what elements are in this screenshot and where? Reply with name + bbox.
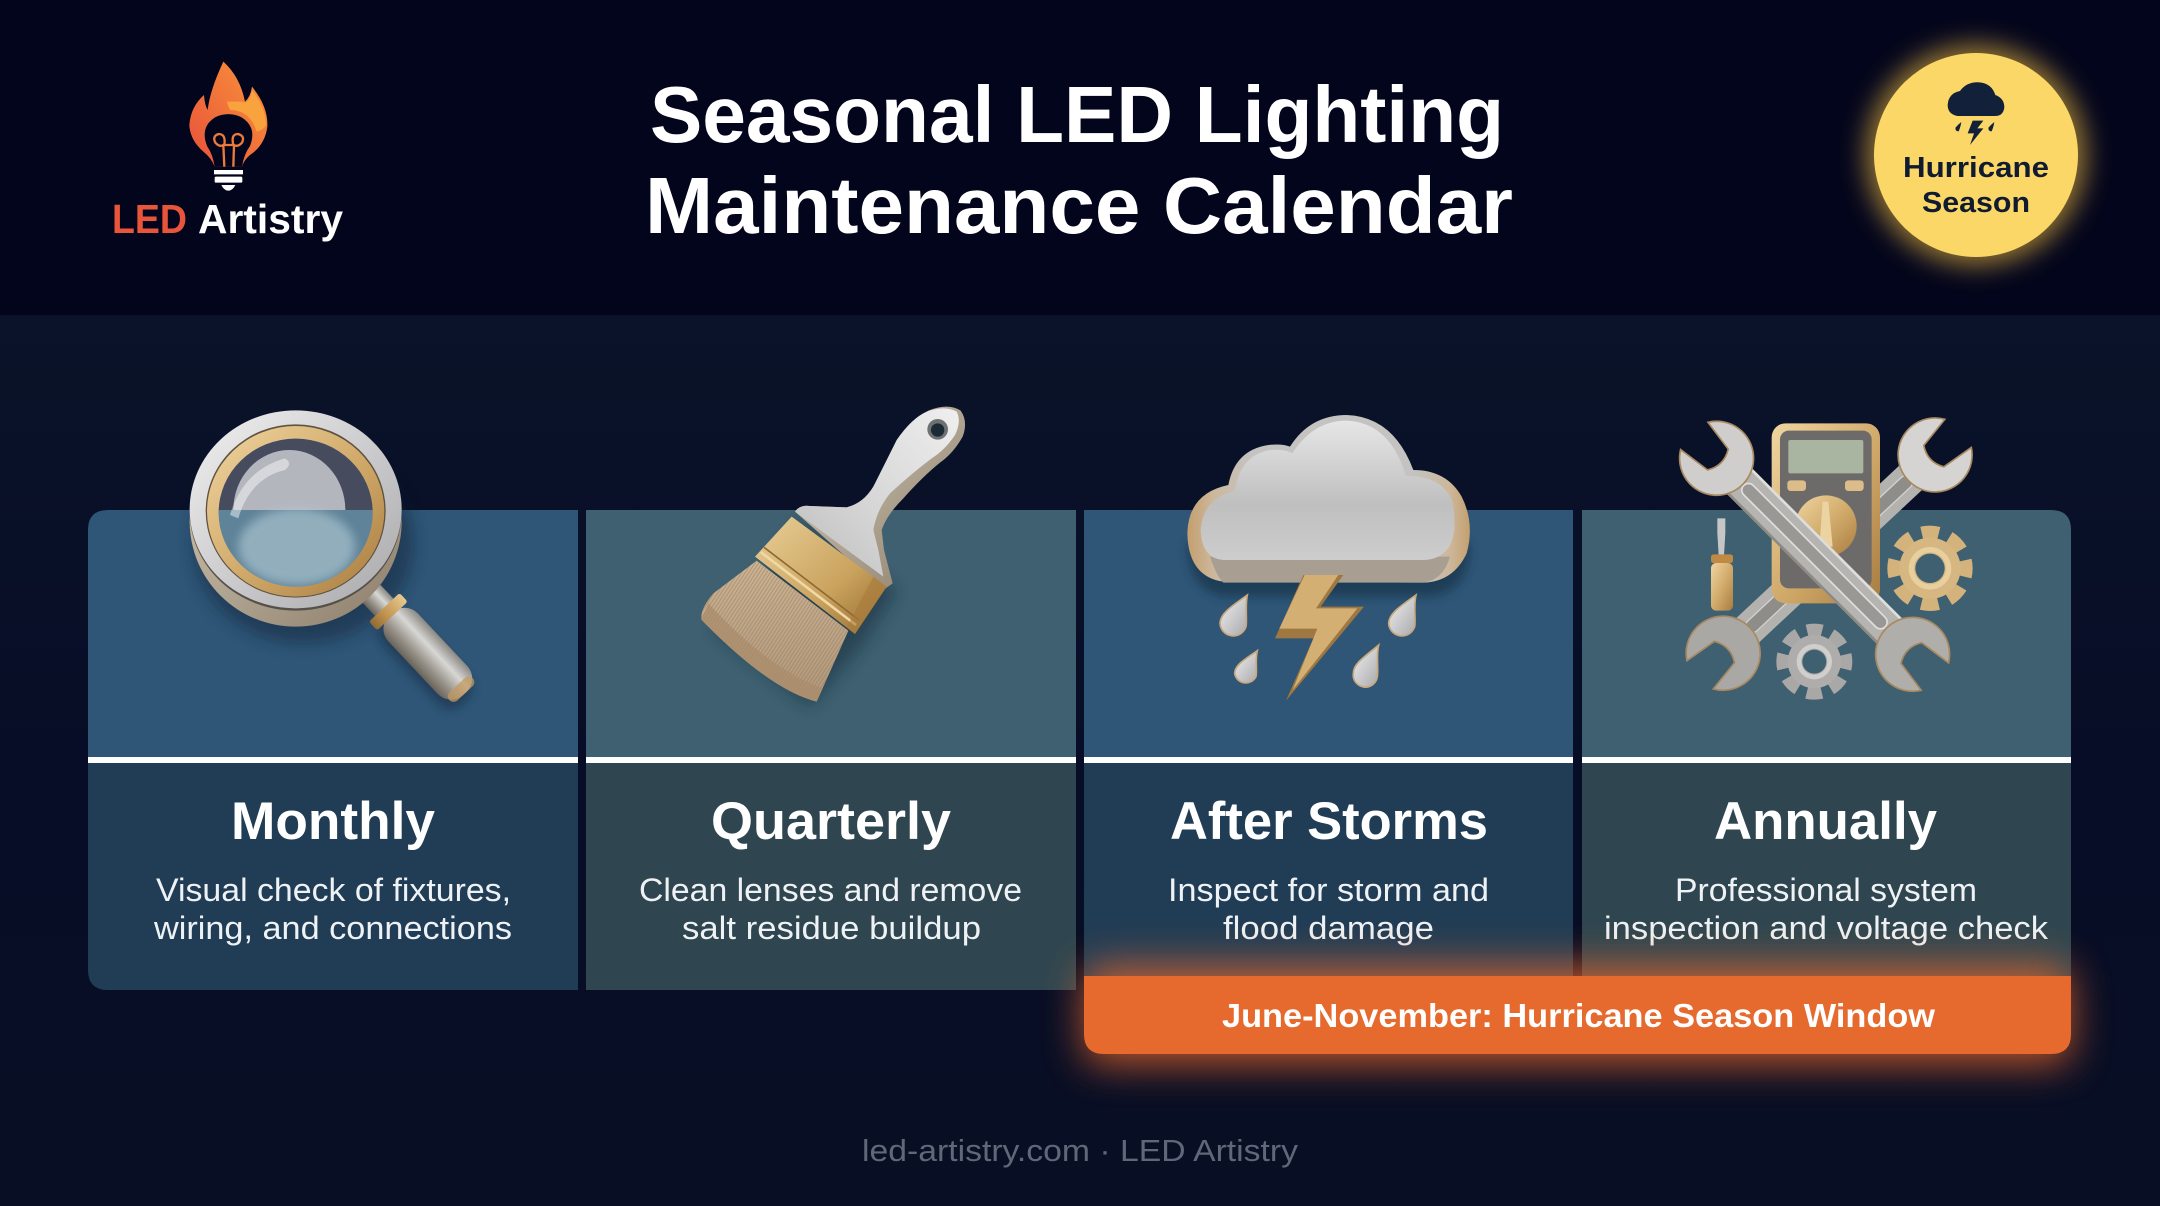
description: quarterly: Clean lenses and remove [639, 872, 1022, 908]
icon: storm cloud [1948, 82, 2004, 145]
description: after storms: Inspect for storm and [1168, 872, 1489, 908]
heading: after storms: After Storms [1170, 792, 1488, 851]
title: Maintenance Calendar [645, 161, 1513, 250]
panel: after storms [1084, 415, 1573, 990]
silver gear [1784, 631, 1845, 692]
panel: annually [1582, 406, 2071, 990]
page body background [0, 315, 2160, 1206]
logo text: LED [112, 196, 187, 242]
screwdriver [1711, 518, 1733, 611]
panel: quarterly [586, 407, 1076, 990]
description: monthly [153, 872, 512, 946]
description: after storms: flood damage [1223, 910, 1434, 946]
description: after storms [1168, 872, 1489, 946]
icon: tools and multimeter [1668, 406, 1983, 703]
gold gear [1895, 533, 1965, 603]
callout: hurricane season banner [1084, 966, 2071, 1064]
title [645, 70, 1513, 250]
logo: LED Artistry [112, 62, 343, 242]
callout: hurricane season banner: June-November: Hurricane Season Window [1222, 997, 1935, 1034]
badge: hurricane season [1866, 45, 2086, 265]
description: quarterly [639, 872, 1022, 946]
icon: flame light bulb [189, 62, 267, 191]
multimeter [1772, 423, 1880, 603]
logo: LED Artistry: Artistry [198, 196, 343, 242]
description: annually: Professional system [1675, 872, 1977, 908]
header band [0, 0, 2160, 315]
heading: annually: Annually [1714, 792, 1938, 851]
icon: storm cloud with lightning and rain [1187, 415, 1470, 701]
description: monthly: Visual check of fixtures, [156, 872, 511, 908]
badge: hurricane season: Season [1922, 187, 2030, 219]
icon: magnifying glass [190, 410, 485, 716]
back wrench [1675, 406, 1983, 702]
footer credit: led-artistry.com · LED Artistry [862, 1133, 1299, 1168]
badge text: Hurricane [1903, 152, 2049, 184]
heading: quarterly: Quarterly [711, 792, 952, 851]
description: annually: inspection and voltage check [1604, 910, 2049, 946]
panel: monthly [88, 410, 578, 990]
description: annually [1604, 872, 2049, 946]
icon: paint brush [701, 407, 965, 707]
description: monthly: wiring, and connections [153, 910, 512, 946]
main wrench [1668, 410, 1961, 703]
title: Seasonal LED Lighting [650, 70, 1504, 159]
description: quarterly: salt residue buildup [682, 910, 981, 946]
heading: monthly: Monthly [231, 792, 436, 851]
